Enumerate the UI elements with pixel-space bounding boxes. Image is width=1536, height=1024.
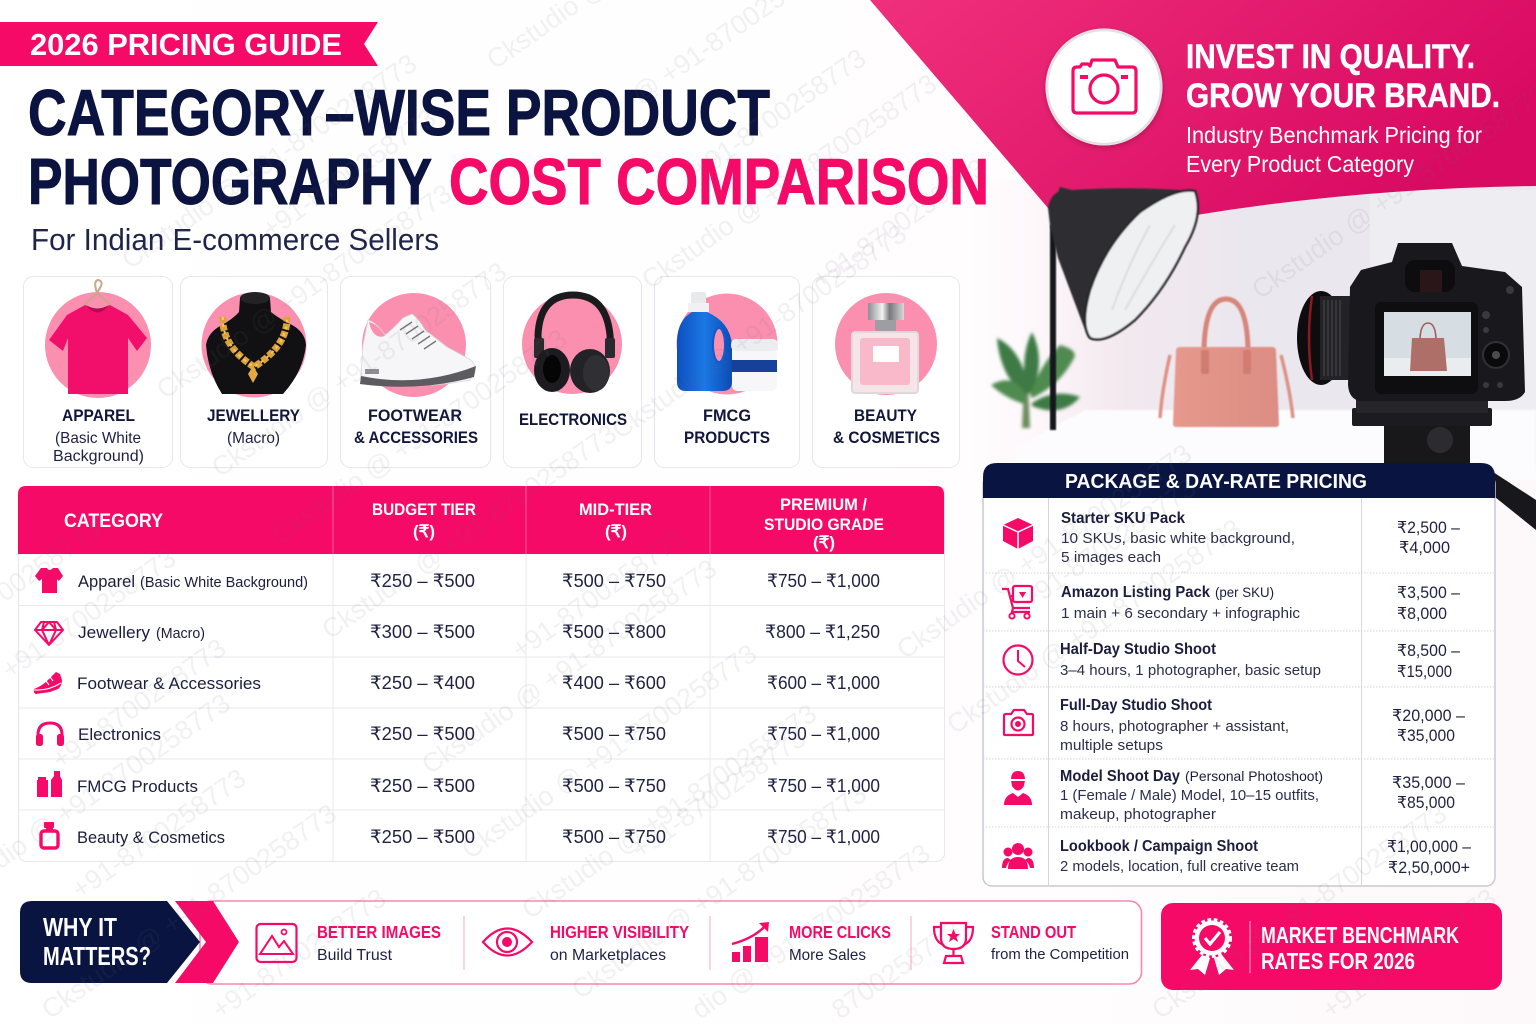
row: footwear: Footwear & Accessories <box>77 674 261 693</box>
watermark overlay: Ckstudio @ +91-8700258773 <box>636 68 942 295</box>
watermark overlay: Ckstudio @ +91-8700258773 <box>516 698 822 925</box>
watermark overlay: Ckstudio @ +91-8700258773 <box>316 418 622 645</box>
watermark overlay: Ckstudio @ +91-8700258773 <box>891 438 1197 665</box>
row: full-day studio shoot: multiple setups <box>1060 737 1163 754</box>
card: footwear <box>340 276 490 468</box>
softbox light <box>1048 187 1198 340</box>
row: amazon listing pack: 1 main + 6 secondary + infographic <box>1061 605 1301 622</box>
card: fmcg: PRODUCTS <box>684 428 770 447</box>
subtitle: For Indian E-commerce Sellers <box>31 222 439 257</box>
row: beauty <box>41 822 880 848</box>
studio table <box>1016 410 1536 480</box>
card: apparel: (Basic White <box>55 430 141 447</box>
hero panel: invest in quality <box>870 0 1536 222</box>
row: starter sku pack: ₹4,000 <box>1399 539 1450 557</box>
item: better images <box>256 922 441 964</box>
watermark overlay: Ckstudio @ +91-8700258773 <box>266 323 572 550</box>
row: lookbook campaign shoot: ₹2,50,000+ <box>1388 859 1470 877</box>
row: fmcg: FMCG Products <box>77 777 198 796</box>
why it matters arrow <box>20 901 239 983</box>
card: electronics: ELECTRONICS <box>519 410 627 429</box>
row: lookbook campaign shoot: ₹1,00,000 – <box>1387 838 1472 856</box>
panel: package and day-rate pricing <box>983 463 1495 886</box>
watermark overlay: +91-8700258773 <box>66 763 251 905</box>
card: jewellery: (Macro) <box>227 430 280 447</box>
blurred plant <box>991 332 1080 428</box>
panel header <box>983 463 1495 498</box>
why it matters arrow: MATTERS? <box>43 941 151 971</box>
category cards <box>24 276 960 468</box>
icon: award ribbon <box>1190 920 1234 975</box>
row: model shoot day: 1 (Female / Male) Model, 10–15 outfits, <box>1060 787 1319 804</box>
watermark overlay: +91-8700258773 <box>626 723 811 865</box>
watermark overlay: +91-8700258773 <box>806 153 991 295</box>
title <box>28 76 989 218</box>
watermark overlay: Ckstudio @ +91-8700258773 <box>606 218 912 445</box>
card: beauty <box>812 276 960 468</box>
item: higher visibility <box>483 922 689 964</box>
why it matters arrow: WHY IT <box>43 912 117 942</box>
row: apparel <box>35 568 880 593</box>
hero text: Industry Benchmark Pricing for <box>1186 122 1482 148</box>
row: model shoot day <box>1004 768 1466 823</box>
row: lookbook campaign shoot <box>1002 838 1472 877</box>
watermark overlay: Ckstudio @ +91-8700258773 <box>416 553 722 780</box>
row: apparel: ₹500 – ₹750 <box>562 570 666 591</box>
row: apparel: (Basic White Background) <box>140 575 308 591</box>
softbox stand pole <box>1050 225 1056 430</box>
row: fmcg: ₹500 – ₹750 <box>562 775 666 796</box>
market benchmark callout <box>1161 903 1502 990</box>
hero text <box>1186 38 1500 177</box>
row: full-day studio shoot: ₹20,000 – <box>1392 707 1466 725</box>
row: half-day studio shoot: Half-Day Studio Shoot <box>1060 641 1216 658</box>
watermark overlay: +91-8700258773 <box>506 523 691 665</box>
market benchmark callout: MARKET BENCHMARK <box>1261 922 1459 948</box>
table header: (₹) <box>413 522 435 541</box>
watermark overlay: +91-8700258773 <box>46 633 231 775</box>
pink handbag <box>1160 299 1293 427</box>
hero text: Every Product Category <box>1186 151 1414 177</box>
title: CATEGORY–WISE PRODUCT <box>28 76 770 149</box>
row: half-day studio shoot: 3–4 hours, 1 photographer, basic setup <box>1060 662 1321 679</box>
watermark overlay: Ckstudio @ +91-8700258773 <box>456 638 762 865</box>
table header: STUDIO GRADE <box>764 515 884 534</box>
row: model shoot day: (Personal Photoshoot) <box>1185 768 1323 784</box>
watermark overlay: +91-8700258773 <box>1316 883 1501 1024</box>
row: footwear: ₹600 – ₹1,000 <box>767 672 880 693</box>
item: higher visibility: HIGHER VISIBILITY <box>550 922 689 942</box>
row: model shoot day: makeup, photographer <box>1060 806 1216 823</box>
table header: CATEGORY <box>64 511 163 532</box>
row: model shoot day: ₹85,000 <box>1397 794 1455 812</box>
title: PHOTOGRAPHY <box>28 145 432 218</box>
card: apparel: APPAREL <box>62 406 135 425</box>
card: jewellery <box>180 276 328 468</box>
header banner: pricing guide <box>0 22 378 66</box>
row: half-day studio shoot: ₹15,000 <box>1397 663 1452 681</box>
row: beauty: ₹500 – ₹750 <box>562 826 666 847</box>
row: full-day studio shoot: ₹35,000 <box>1397 727 1455 745</box>
row: amazon listing pack <box>1002 584 1461 623</box>
scene wall <box>955 180 1536 470</box>
market benchmark callout: RATES FOR 2026 <box>1261 948 1415 974</box>
row: electronics <box>36 723 880 746</box>
table header: PREMIUM / <box>780 495 867 514</box>
watermark overlay: +91-8700258773 <box>686 43 871 185</box>
row: starter sku pack: Starter SKU Pack <box>1061 510 1185 527</box>
table header: (₹) <box>605 522 627 541</box>
card: electronics <box>504 276 642 468</box>
watermark overlay: dio @ +91-8700258773 <box>686 838 936 1024</box>
row: jewellery: Jewellery <box>78 623 151 642</box>
hero text: GROW YOUR BRAND. <box>1186 77 1500 115</box>
item: better images: BETTER IMAGES <box>317 922 441 942</box>
watermark overlay: Ckstudio @ +91-8700258773 <box>941 513 1247 740</box>
tripod leg <box>1480 470 1536 530</box>
item: stand out <box>934 922 1129 963</box>
row: footwear: ₹250 – ₹400 <box>370 672 475 693</box>
row: amazon listing pack: (per SKU) <box>1215 584 1274 600</box>
row: footwear <box>34 672 880 694</box>
card: fmcg: FMCG <box>703 406 751 425</box>
header banner: pricing guide: 2026 PRICING GUIDE <box>30 27 342 62</box>
watermark overlay: Ckstudio @ +91-8700258773 <box>566 778 872 1005</box>
hero text: INVEST IN QUALITY. <box>1186 38 1475 76</box>
row: apparel: ₹750 – ₹1,000 <box>767 570 880 591</box>
watermark overlay: Ckstudio @ +91-8700258773 <box>206 256 512 483</box>
row: starter sku pack <box>1003 510 1461 566</box>
row: jewellery <box>35 621 880 645</box>
row: electronics: ₹250 – ₹500 <box>370 723 475 744</box>
pricing table <box>18 486 944 862</box>
row: starter sku pack: 10 SKUs, basic white background, <box>1061 530 1295 547</box>
watermark overlay: Ckstudio @ +91-8700258773 <box>116 48 422 275</box>
photo scene: studio setup <box>955 180 1536 530</box>
card: apparel: Background) <box>53 448 144 465</box>
row: full-day studio shoot: Full-Day Studio Shoot <box>1060 697 1212 714</box>
card: jewellery: JEWELLERY <box>207 406 301 425</box>
row: beauty: Beauty & Cosmetics <box>77 828 225 847</box>
table header: BUDGET TIER <box>372 500 476 519</box>
row: apparel: ₹250 – ₹500 <box>370 570 475 591</box>
row: fmcg: ₹250 – ₹500 <box>370 775 475 796</box>
item: higher visibility: on Marketplaces <box>550 947 666 964</box>
panel header: PACKAGE & DAY-RATE PRICING <box>1065 471 1367 493</box>
watermark overlay: +91-8700258773 <box>256 103 441 245</box>
item: more clicks <box>732 922 891 964</box>
row: half-day studio shoot: ₹8,500 – <box>1397 642 1461 660</box>
watermark overlay: Ckstudio @ +91-8700258773 <box>1146 798 1452 1024</box>
row: jewellery: ₹800 – ₹1,250 <box>765 621 880 642</box>
row: model shoot day: ₹35,000 – <box>1392 774 1466 792</box>
row: starter sku pack: ₹2,500 – <box>1397 519 1461 537</box>
watermark overlay: +91-8700258773 <box>206 883 391 1024</box>
why it matters strip <box>20 901 1142 984</box>
row: model shoot day: Model Shoot Day <box>1060 768 1180 785</box>
row: beauty: ₹750 – ₹1,000 <box>767 826 880 847</box>
row: jewellery: ₹300 – ₹500 <box>370 621 475 642</box>
card: footwear: FOOTWEAR <box>368 406 462 425</box>
table header: (₹) <box>813 533 835 552</box>
watermark overlay: Ckstudio @ +91-8700258773 <box>151 178 457 405</box>
item: stand out: STAND OUT <box>991 922 1076 942</box>
row: jewellery: ₹500 – ₹800 <box>562 621 666 642</box>
row: footwear: ₹400 – ₹600 <box>562 672 666 693</box>
card: fmcg <box>654 276 800 468</box>
row: electronics: Electronics <box>78 725 161 744</box>
row: electronics: ₹500 – ₹750 <box>562 723 666 744</box>
row: full-day studio shoot: 8 hours, photographer + assistant, <box>1060 718 1289 735</box>
item: better images: Build Trust <box>317 947 393 964</box>
icon: camera in white circle <box>1046 28 1162 146</box>
watermark overlay: +91-8700258773 <box>1016 473 1201 615</box>
row: electronics: ₹750 – ₹1,000 <box>767 723 880 744</box>
item: stand out: from the Competition <box>991 946 1129 963</box>
row: apparel: Apparel <box>78 572 135 591</box>
watermark overlay: Ckstudio @ +91-8700258773 <box>36 798 342 1024</box>
row: lookbook campaign shoot: Lookbook / Campaign Shoot <box>1060 838 1258 855</box>
row: lookbook campaign shoot: 2 models, location, full creative team <box>1060 858 1299 875</box>
watermark overlay: +91-8700258773 <box>0 543 181 685</box>
row: full-day studio shoot <box>1004 697 1466 754</box>
watermark overlay: 8700258773 <box>826 914 966 1024</box>
item: more clicks: More Sales <box>789 947 866 964</box>
row: amazon listing pack: Amazon Listing Pack <box>1061 584 1210 601</box>
row: starter sku pack: 5 images each <box>1061 549 1161 566</box>
item: more clicks: MORE CLICKS <box>789 922 891 942</box>
card: beauty: BEAUTY <box>854 406 918 425</box>
DSLR camera with bag on screen <box>1297 243 1525 465</box>
row: amazon listing pack: ₹8,000 <box>1397 605 1447 623</box>
table header: MID-TIER <box>579 500 652 519</box>
row: fmcg: ₹750 – ₹1,000 <box>767 775 880 796</box>
title: COST COMPARISON <box>449 145 989 218</box>
row: jewellery: (Macro) <box>156 626 205 642</box>
table header <box>18 486 944 554</box>
row: beauty: ₹250 – ₹500 <box>370 826 475 847</box>
card: beauty: & COSMETICS <box>833 428 940 447</box>
card: apparel <box>24 276 172 468</box>
card: footwear: & ACCESSORIES <box>354 428 478 447</box>
row: fmcg <box>37 771 880 797</box>
row: amazon listing pack: ₹3,500 – <box>1397 584 1461 602</box>
row: half-day studio shoot <box>1004 641 1461 681</box>
